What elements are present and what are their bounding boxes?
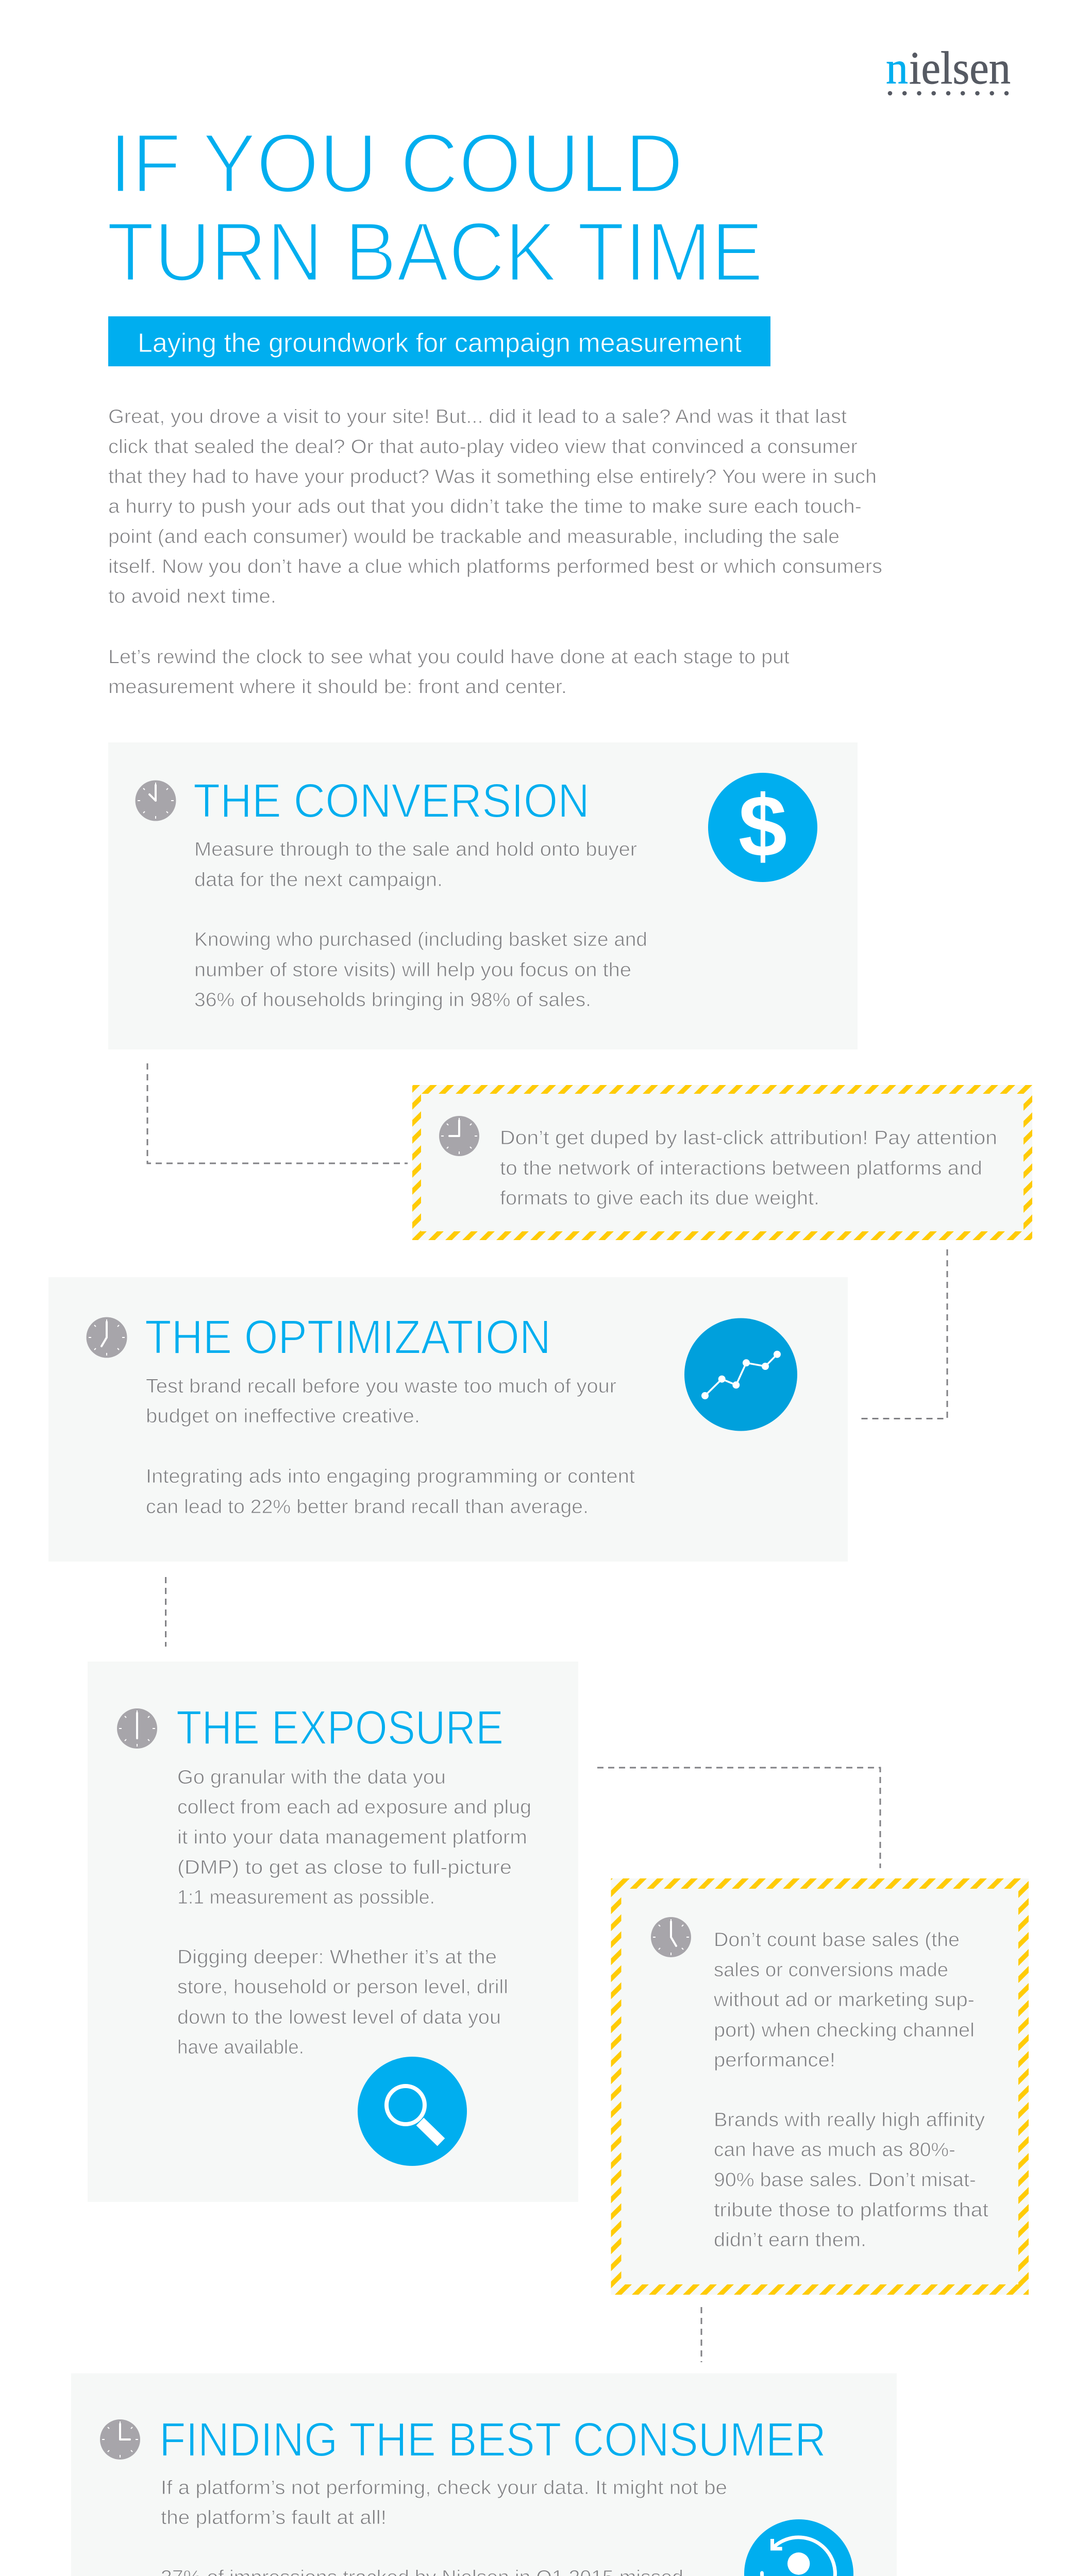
body text: have available.: [177, 2037, 304, 2058]
callout: base sales: [611, 1878, 1029, 2295]
body text: [177, 1767, 531, 2058]
intro text: to avoid next time.: [108, 586, 276, 607]
icon: clock: [100, 2419, 140, 2460]
body text: it into your data management platform: [177, 1827, 527, 1849]
icon: line chart: [684, 1318, 797, 1431]
body text: down to the lowest level of data you: [177, 2007, 501, 2028]
intro text: measurement where it should be: front and center.: [108, 676, 567, 698]
intro text: itself. Now you don’t have a clue which platforms performed best or which consumers: [108, 556, 882, 578]
panel: the conversion: [108, 742, 858, 1049]
body text: collect from each ad exposure and plug: [177, 1797, 531, 1818]
callout text: Don’t get duped by last-click attribution! Pay attention: [500, 1127, 997, 1149]
intro text: Great, you drove a visit to your site! But... did it lead to a sale? And was it that last: [108, 406, 847, 428]
callout text: 90% base sales. Don’t misat-: [714, 2169, 976, 2191]
connector: optimization to exposure: [165, 1577, 166, 1647]
logo: nielsen: n: [886, 43, 908, 94]
body text: Digging deeper: Whether it’s at the: [177, 1946, 497, 1968]
callout text: can have as much as 80%-: [714, 2139, 955, 2161]
callout text: port) when checking channel: [714, 2020, 975, 2041]
body text: [194, 839, 647, 1011]
intro text: point (and each consumer) would be trackable and measurable, including the sale: [108, 526, 840, 548]
connector: attribution tip to optimization: [858, 1249, 947, 1419]
intro text: [108, 406, 882, 698]
body text: 36% of households bringing in 98% of sales.: [194, 989, 591, 1011]
body text: Go granular with the data you: [177, 1767, 446, 1788]
body text: Integrating ads into engaging programming or content: [146, 1466, 635, 1487]
callout text: sales or conversions made: [714, 1959, 948, 1981]
body text: budget on ineffective creative.: [146, 1405, 420, 1427]
heading: THE CONVERSION: [193, 774, 590, 827]
panel: the exposure: [88, 1662, 578, 2202]
body text: number of store visits) will help you focus on the: [194, 959, 631, 981]
heading: FINDING THE BEST CONSUMER: [159, 2413, 826, 2466]
title: [107, 116, 763, 299]
body text: 1:1 measurement as possible.: [177, 1887, 435, 1908]
body text: Knowing who purchased (including basket size and: [194, 929, 647, 951]
panel: the optimization: [48, 1277, 848, 1562]
title: TURN BACK TIME: [107, 205, 763, 299]
logo: nielsen: ielsen: [909, 43, 1011, 94]
icon: returning consumer: [744, 2519, 853, 2576]
callout text: performance!: [714, 2049, 835, 2071]
intro text: click that sealed the deal? Or that auto-play video view that convinced a consumer: [108, 436, 858, 457]
callout text: formats to give each its due weight.: [500, 1188, 819, 1209]
intro text: that they had to have your product? Was it something else entirely? You were in such: [108, 466, 877, 487]
body text: [161, 2477, 727, 2576]
intro text: Let’s rewind the clock to see what you could have done at each stage to put: [108, 646, 790, 668]
icon: dollar: $: [739, 777, 787, 875]
callout: last-click attribution: [412, 1085, 1032, 1240]
connector: base sales tip to best consumer: [701, 2307, 702, 2362]
body text: Measure through to the sale and hold onto buyer: [194, 839, 637, 860]
subtitle banner: Laying the groundwork for campaign measurement: [138, 328, 742, 358]
body text: (DMP) to get as close to full-picture: [177, 1857, 512, 1878]
callout text: [713, 1929, 988, 2251]
body text: [146, 1376, 635, 1518]
icon: clock: [135, 780, 176, 821]
body text: If a platform’s not performing, check your data. It might not be: [161, 2477, 727, 2499]
connector: exposure to base sales tip: [597, 1768, 880, 1868]
icon: magnifier: [358, 2057, 467, 2166]
icon: clock: [87, 1317, 127, 1358]
callout text: to the network of interactions between platforms and: [500, 1158, 982, 1179]
body text: data for the next campaign.: [194, 869, 443, 891]
intro text: a hurry to push your ads out that you didn’t take the time to make sure each touch-: [108, 496, 862, 517]
body text: can lead to 22% better brand recall than average.: [146, 1496, 589, 1518]
callout text: Don’t count base sales (the: [714, 1929, 960, 1951]
body text: store, household or person level, drill: [177, 1976, 508, 1998]
icon: dollar: [708, 773, 817, 882]
subtitle banner: [108, 316, 770, 366]
heading: THE OPTIMIZATION: [145, 1310, 551, 1364]
icon: clock: [651, 1917, 691, 1957]
panel: finding the best consumer: [71, 2374, 897, 2576]
callout text: didn’t earn them.: [714, 2229, 866, 2251]
title: IF YOU COULD: [109, 116, 683, 210]
callout text: tribute those to platforms that: [714, 2199, 988, 2221]
callout text: [500, 1127, 997, 1209]
connector: conversion to attribution tip: [147, 1063, 408, 1163]
callout text: without ad or marketing sup-: [713, 1989, 975, 2011]
icon: clock: [117, 1708, 157, 1749]
icon: clock: [439, 1116, 479, 1156]
body text: Test brand recall before you waste too much of your: [146, 1376, 616, 1397]
heading: THE EXPOSURE: [176, 1701, 504, 1754]
body text: the platform’s fault at all!: [161, 2507, 387, 2529]
callout text: Brands with really high affinity: [714, 2109, 985, 2131]
